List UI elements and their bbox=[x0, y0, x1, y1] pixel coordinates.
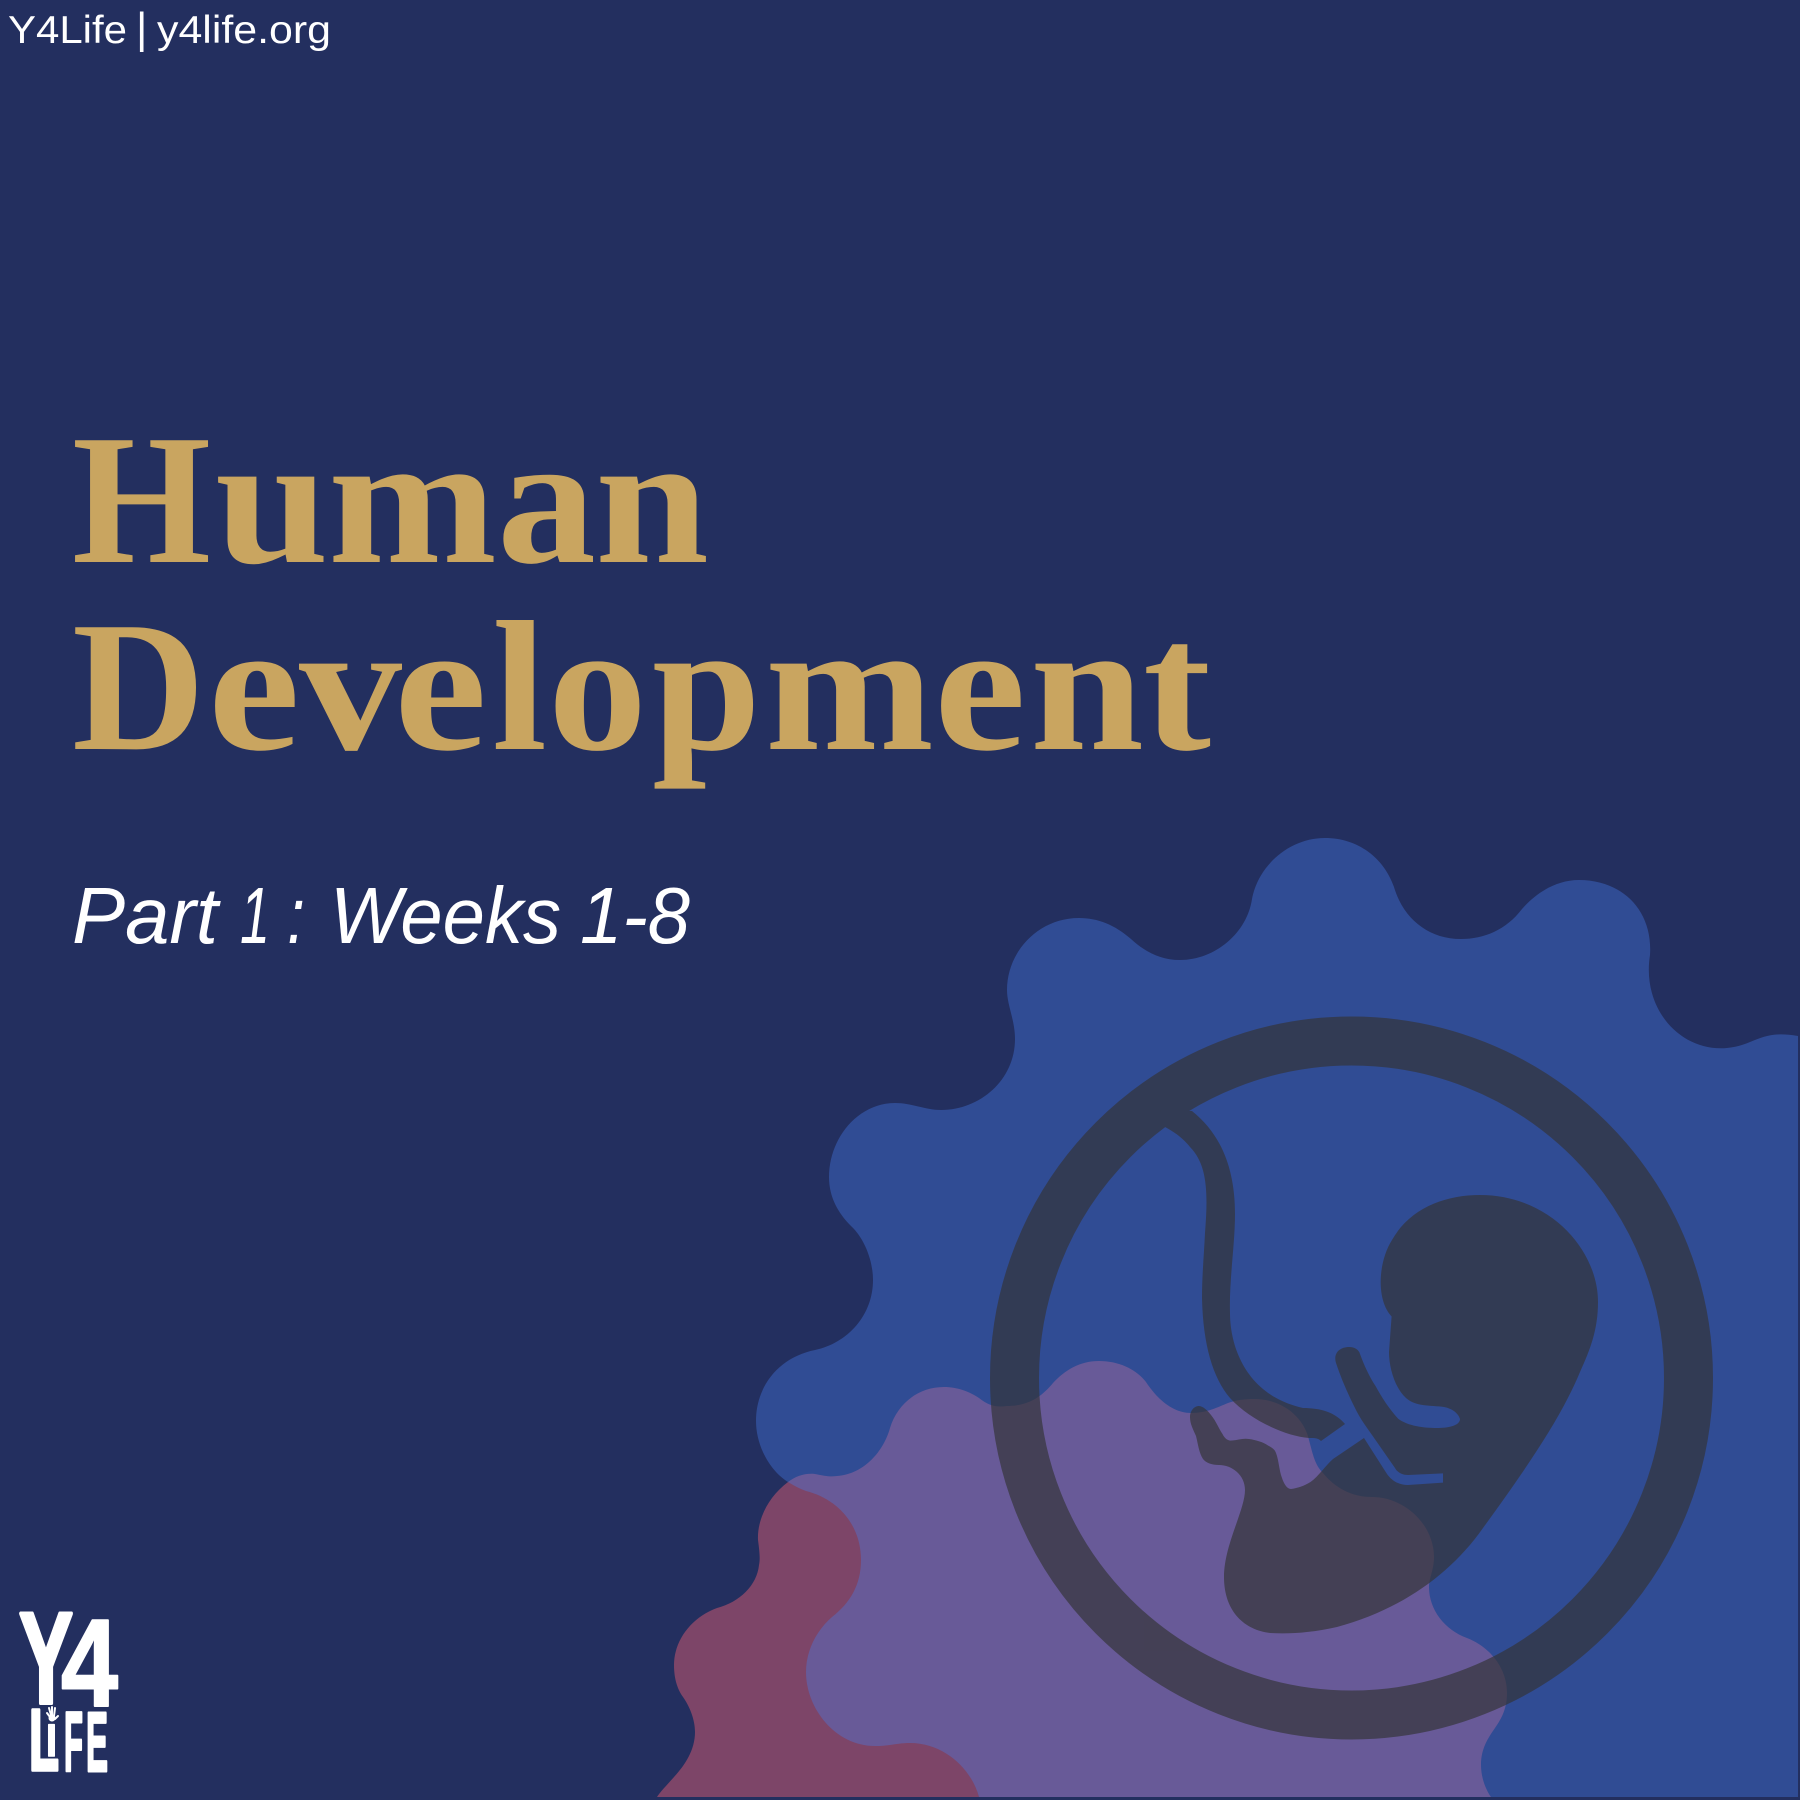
subtitle: Part bbox=[72, 871, 221, 960]
logo: Y4 Life bbox=[19, 1585, 118, 1789]
title: l bbox=[492, 584, 547, 790]
icon part: womb ring bbox=[1014, 1041, 1688, 1715]
title: o bbox=[548, 584, 647, 790]
title: e bbox=[934, 584, 1026, 790]
decorative blob: blue bbox=[756, 838, 1798, 1797]
title: t bbox=[1143, 584, 1211, 790]
logo: Y4 Life: Y bbox=[19, 1585, 73, 1731]
title: e bbox=[208, 584, 300, 790]
logo: Y4 Life: F bbox=[64, 1695, 83, 1789]
logo: Y4 Life: E bbox=[86, 1695, 108, 1789]
title: v bbox=[299, 584, 402, 790]
header: source line: Y4Life bbox=[8, 9, 127, 52]
title: m bbox=[328, 397, 497, 603]
title: n bbox=[595, 397, 709, 603]
title bbox=[72, 397, 1211, 790]
title: D bbox=[72, 584, 205, 790]
decorative blob: red bbox=[657, 1482, 979, 1797]
title: m bbox=[765, 584, 934, 790]
subtitle: Weeks bbox=[330, 871, 561, 960]
title: u bbox=[215, 397, 329, 603]
icon part: embryo body bbox=[1190, 1195, 1598, 1633]
header: source line: | bbox=[136, 4, 147, 53]
title: e bbox=[394, 584, 487, 790]
subtitle: : bbox=[287, 871, 305, 960]
header: source line: y4life.org bbox=[157, 9, 331, 52]
title: n bbox=[1030, 584, 1144, 790]
title: a bbox=[497, 397, 596, 603]
title: H bbox=[72, 397, 211, 603]
logo: Y4 Life: L bbox=[29, 1692, 59, 1789]
logo: Y4 Life: 4 bbox=[61, 1595, 118, 1733]
subtitle: 1 bbox=[240, 871, 270, 960]
title: p bbox=[652, 584, 761, 790]
subtitle: 1-8 bbox=[580, 871, 690, 960]
icon: raised hand bbox=[47, 1707, 58, 1720]
decorative blob: purple bbox=[788, 1361, 1507, 1797]
icon: embryo in womb bbox=[1014, 1041, 1688, 1715]
logo: Y4 Life: I bbox=[46, 1715, 57, 1766]
icon part: umbilical cord bbox=[1160, 1110, 1345, 1441]
